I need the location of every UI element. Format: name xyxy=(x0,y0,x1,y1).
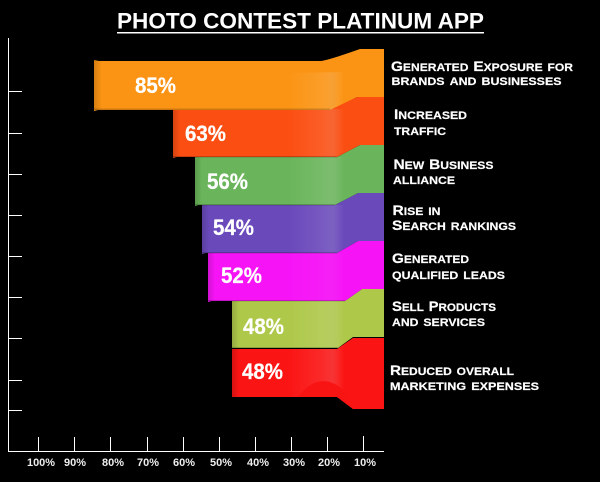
label: sell products and services: Sell Products xyxy=(392,298,496,315)
label: new business alliance xyxy=(393,156,494,188)
x axis labels: 100% xyxy=(27,457,55,469)
label: reduced overall marketing expenses: Reduced overall xyxy=(390,362,514,379)
bar: generated exposure 85%: 85% xyxy=(135,73,176,98)
label: generated exposure: brands and businesses xyxy=(392,72,562,89)
x axis labels: 60% xyxy=(173,457,195,469)
x axis labels: 30% xyxy=(283,457,305,469)
bar: generated qualified leads 52% xyxy=(208,241,384,302)
chart axes xyxy=(8,38,384,452)
x axis labels: 50% xyxy=(210,457,232,469)
title: PHOTO CONTEST PLATINUM APP xyxy=(117,8,484,34)
x axis labels: 10% xyxy=(354,457,376,469)
label: generated exposure: Generated Exposure for xyxy=(391,58,573,75)
x axis labels: 90% xyxy=(64,457,86,469)
label: sell products and services xyxy=(392,298,496,330)
bar: generated qualified leads 52%: 52% xyxy=(221,263,262,288)
bar: increased traffic 63% xyxy=(173,97,384,158)
label: generated exposure xyxy=(391,58,573,89)
x axis labels xyxy=(27,457,376,469)
bar: increased traffic 63%: 63% xyxy=(185,121,226,146)
x axis labels: 20% xyxy=(318,457,340,469)
bar: rise in search rankings 54%: 54% xyxy=(213,215,254,240)
x axis labels: 70% xyxy=(137,457,159,469)
bar: new business alliance 56% xyxy=(195,145,384,206)
bar: rise in search rankings 54% xyxy=(202,193,384,254)
label: rise in search rankings xyxy=(392,202,516,234)
label: generated qualified leads xyxy=(392,250,505,283)
bar: reduced overall marketing expenses 48% xyxy=(232,338,384,409)
x axis labels: 40% xyxy=(247,457,269,469)
bar: new business alliance 56%: 56% xyxy=(207,169,248,194)
bar: sell products and services 48%: 48% xyxy=(243,314,284,339)
label: generated qualified leads: qualified leads xyxy=(392,266,505,283)
label: reduced overall marketing expenses xyxy=(390,362,539,394)
label: new business alliance: New Business xyxy=(394,156,494,173)
x axis labels: 80% xyxy=(102,457,124,469)
label: generated qualified leads: Generated xyxy=(392,250,469,267)
label: increased traffic xyxy=(394,106,467,139)
label: sell products and services: and services xyxy=(392,313,485,330)
label: reduced overall marketing expenses: marketing expenses xyxy=(390,377,539,394)
label: increased traffic: traffic xyxy=(394,122,446,139)
bar: reduced overall marketing expenses 48%: 48% xyxy=(242,359,283,384)
label: rise in search rankings: Search rankings xyxy=(392,217,516,234)
bar: sell products and services 48% xyxy=(232,289,384,348)
bar: generated exposure 85% xyxy=(94,49,384,111)
label: rise in search rankings: Rise in xyxy=(392,202,441,219)
label: increased traffic: Increased xyxy=(394,106,467,123)
label: new business alliance: alliance xyxy=(393,171,455,188)
